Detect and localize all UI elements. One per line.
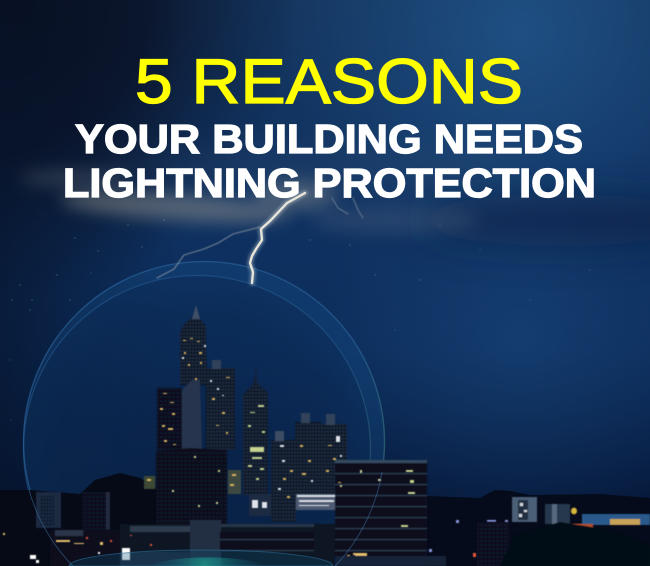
street lights — [3, 520, 590, 563]
lit windows — [147, 338, 415, 527]
protective sphere — [23, 262, 385, 566]
slab: pale center — [182, 380, 202, 450]
tower: spire right — [243, 367, 268, 495]
low lit building — [249, 494, 336, 516]
title — [63, 47, 596, 206]
tower: center right — [206, 360, 235, 450]
twin towers — [295, 413, 347, 498]
title: your building needs: YOUR BUILDING NEEDS — [75, 116, 583, 162]
tower: left — [157, 388, 182, 450]
background tree line — [0, 473, 650, 566]
distant buildings: right — [477, 497, 650, 566]
skyline towers — [50, 305, 446, 566]
sphere front rim — [29, 472, 382, 566]
tower: tallest with spire — [180, 305, 207, 385]
tower: medium — [271, 431, 296, 522]
storm clouds — [20, 150, 540, 234]
title: 5 reasons: 5 REASONS — [135, 47, 523, 117]
dark block foreground — [156, 448, 227, 524]
stars — [10, 219, 590, 420]
right office block — [335, 460, 427, 556]
low-rise podium — [50, 520, 446, 566]
lightning bolt — [157, 193, 363, 283]
distant buildings: left — [36, 492, 110, 530]
sphere base glow — [69, 550, 333, 566]
small lit block — [228, 470, 241, 494]
title: lightning protection: LIGHTNING PROTECTION — [63, 160, 596, 206]
